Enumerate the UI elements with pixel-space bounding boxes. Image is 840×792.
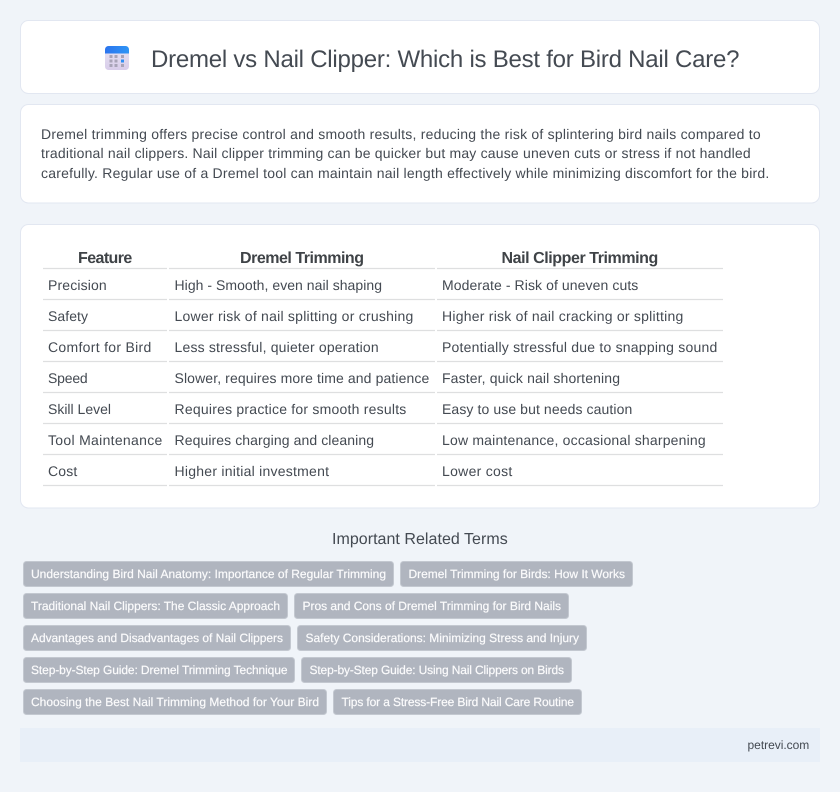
row: Skill Level: Skill Level — [48, 401, 111, 417]
row: Speed: Faster, quick nail shortening — [442, 370, 620, 386]
text block: description: carefully. Regular use of a Dremel tool can maintain nail length effectively while minimizing discomfort for the bird. — [41, 165, 769, 181]
row: Comfort for Bird — [48, 339, 717, 355]
row: Speed — [48, 370, 620, 386]
chip — [294, 594, 568, 618]
row: Tool Maintenance: Low maintenance, occasional sharpening — [442, 432, 706, 448]
chip — [24, 658, 294, 682]
chip — [298, 626, 586, 650]
chip: Pros and Cons of Dremel Trimming for Bird Nails — [302, 599, 561, 613]
chip: Dremel Trimming for Birds: How It Works — [408, 567, 625, 581]
row: Speed: Slower, requires more time and patience — [174, 370, 430, 386]
chip — [400, 562, 632, 586]
row: Cost: Lower cost — [442, 463, 512, 479]
heading: related terms: Important Related Terms — [332, 531, 508, 548]
row: Tool Maintenance — [48, 432, 706, 448]
row: Tool Maintenance: Tool Maintenance — [48, 432, 163, 448]
footer — [20, 728, 820, 762]
chip: Safety Considerations: Minimizing Stress and Injury — [306, 631, 579, 645]
row: Safety: Safety — [48, 308, 88, 324]
row: Precision: Precision — [48, 277, 107, 293]
chip: Step-by-Step Guide: Using Nail Clippers on Birds — [310, 663, 564, 677]
table header row: Nail Clipper Trimming — [502, 250, 658, 267]
table header row: Feature — [78, 250, 132, 267]
row: Speed: Speed — [48, 370, 88, 386]
row: Comfort for Bird: Comfort for Bird — [48, 339, 151, 355]
table header row: Dremel Trimming — [240, 250, 364, 267]
chip — [334, 690, 582, 714]
chip — [24, 594, 288, 618]
row: Skill Level — [48, 401, 632, 417]
row: Precision: Moderate - Risk of uneven cuts — [442, 277, 638, 293]
row: Cost: Cost — [48, 463, 77, 479]
row: Skill Level: Easy to use but needs caution — [442, 401, 632, 417]
row: Safety — [48, 308, 683, 324]
chip: Step-by-Step Guide: Dremel Trimming Technique — [31, 663, 288, 677]
chip: Traditional Nail Clippers: The Classic Approach — [31, 599, 280, 613]
chip: Choosing the Best Nail Trimming Method for Your Bird — [31, 695, 319, 709]
icon: calendar — [105, 46, 129, 70]
chip — [24, 626, 290, 650]
row: Cost: Higher initial investment — [174, 463, 329, 479]
panel: header — [20, 20, 820, 94]
chip — [24, 562, 394, 586]
chip: Understanding Bird Nail Anatomy: Importance of Regular Trimming — [31, 567, 386, 581]
row: Cost — [48, 463, 512, 479]
chip: Tips for a Stress-Free Bird Nail Care Routine — [342, 695, 574, 709]
row: Comfort for Bird: Less stressful, quieter operation — [174, 339, 379, 355]
related terms chips — [24, 562, 632, 714]
footer source text: petrevi.com — [748, 738, 809, 752]
row: Tool Maintenance: Requires charging and cleaning — [174, 432, 374, 448]
panel: comparison table — [20, 224, 820, 508]
row: Precision: High - Smooth, even nail shaping — [174, 277, 382, 293]
row: Safety: Lower risk of nail splitting or crushing — [174, 308, 413, 324]
text block: description: traditional nail clippers. Nail clipper trimming can be quicker but may cause uneven cuts or stress if not handled — [41, 145, 751, 161]
table header row — [78, 250, 658, 267]
text block: description: Dremel trimming offers precise control and smooth results, reducing the risk of splintering bird nails compared to — [41, 126, 761, 142]
chip: Advantages and Disadvantages of Nail Clippers — [31, 631, 283, 645]
row: Skill Level: Requires practice for smooth results — [174, 401, 406, 417]
text block: description — [41, 126, 769, 181]
row: Comfort for Bird: Potentially stressful due to snapping sound — [442, 339, 717, 355]
row: Precision — [48, 277, 638, 293]
panel: description — [20, 104, 820, 203]
chip — [302, 658, 572, 682]
row: Safety: Higher risk of nail cracking or splitting — [442, 308, 683, 324]
title: Dremel vs Nail Clipper: Which is Best for Bird Nail Care? — [151, 46, 740, 73]
chip — [24, 690, 326, 714]
